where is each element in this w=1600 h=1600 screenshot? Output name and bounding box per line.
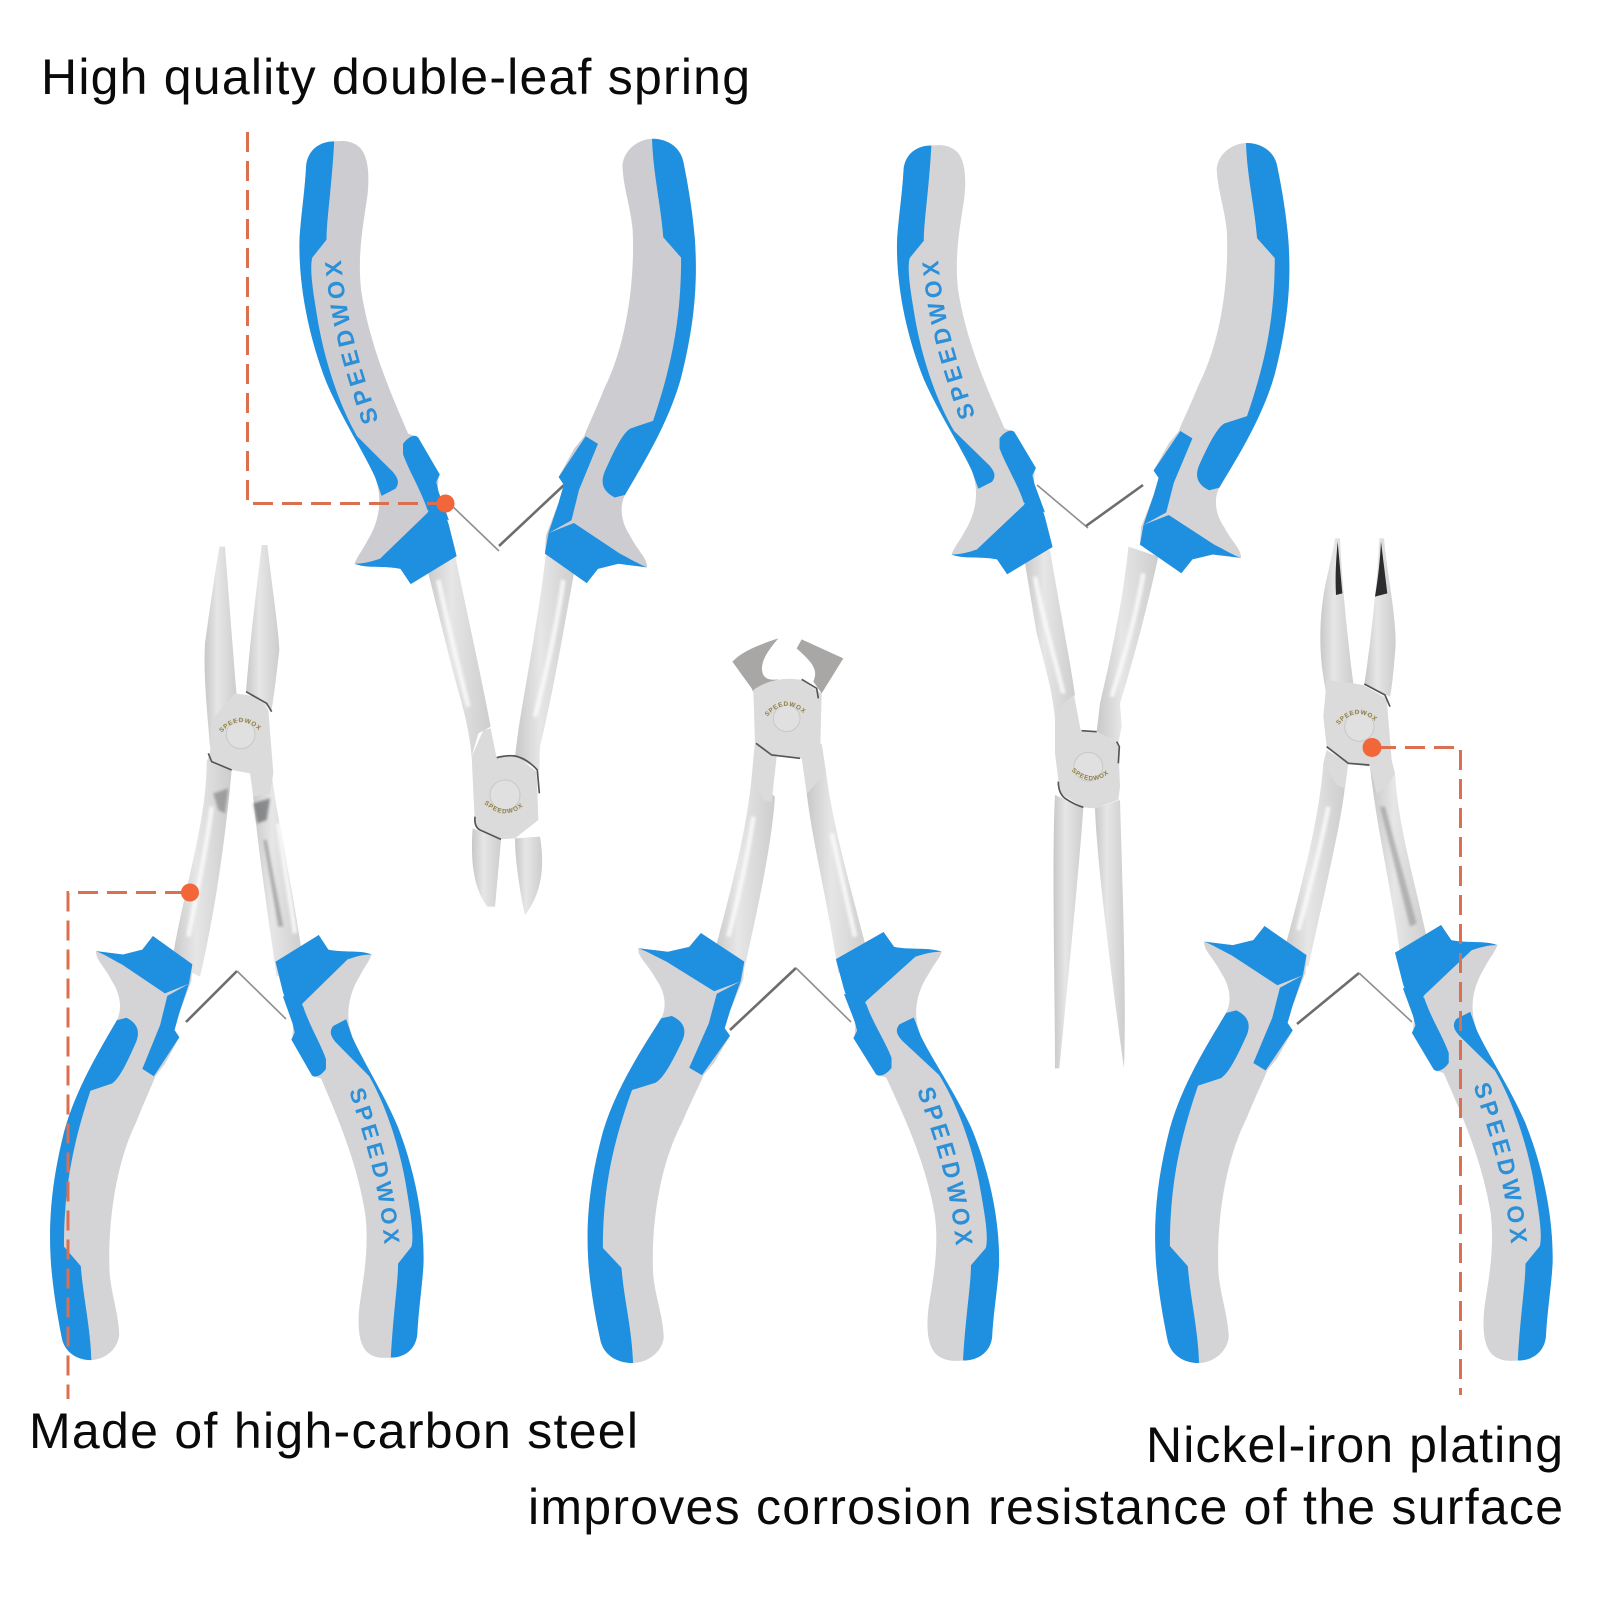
caption: nickel-iron plating line two: improves corrosion resistance of the surface [528, 1479, 1563, 1535]
plier A handles [299, 138, 696, 584]
plier E handles: SPEEDWOX [1474, 1083, 1528, 1244]
plier B metal head and jaws [174, 545, 301, 976]
plier C metal head and arms [716, 638, 865, 974]
callout leader: double-leaf spring [248, 132, 454, 512]
plier D spring [1037, 485, 1143, 528]
plier C handles: SPEEDWOX [918, 1088, 973, 1246]
plier E metal head and jaws: SPEEDWOX [1336, 710, 1378, 724]
plier D metal head and jaws: SPEEDWOX [1072, 768, 1108, 780]
callout leader: nickel-iron plating [1362, 738, 1460, 1395]
plier A metal head and arms [428, 554, 574, 915]
plier A handles: SPEEDWOX [324, 260, 378, 424]
plier D handles: SPEEDWOX [922, 260, 974, 419]
plier A metal head and arms: SPEEDWOX [484, 800, 523, 814]
caption: high-carbon steel: Made of high-carbon steel [29, 1403, 638, 1459]
plier B metal head and jaws: SPEEDWOX [219, 718, 262, 732]
plier B spring [186, 971, 286, 1022]
plier C: bottom centre end cutting [588, 638, 1000, 1363]
plier D metal head and jaws [1025, 546, 1158, 1068]
callout leader: high-carbon steel [68, 884, 199, 1399]
plier E: bottom right bent needle nose [1155, 538, 1553, 1363]
caption: nickel-iron plating line one: Nickel-iron plating [1146, 1417, 1563, 1473]
plier B handles [50, 935, 424, 1360]
caption: double-leaf spring: High quality double-leaf spring [41, 49, 750, 105]
plier C spring [730, 968, 851, 1030]
plier E handles [1155, 925, 1553, 1363]
plier E metal head and jaws [1286, 538, 1426, 966]
plier D handles [896, 143, 1290, 574]
plier C metal head and arms: SPEEDWOX [764, 702, 806, 716]
plier D: top right long needle nose [856, 143, 1304, 1108]
plier A spring [449, 485, 564, 551]
plier B handles: SPEEDWOX [350, 1088, 400, 1244]
plier E spring [1297, 973, 1412, 1024]
plier A: top left diagonal cutters [286, 138, 696, 955]
plier B: bottom left flat nose [50, 509, 439, 1360]
plier C handles [588, 932, 1000, 1363]
